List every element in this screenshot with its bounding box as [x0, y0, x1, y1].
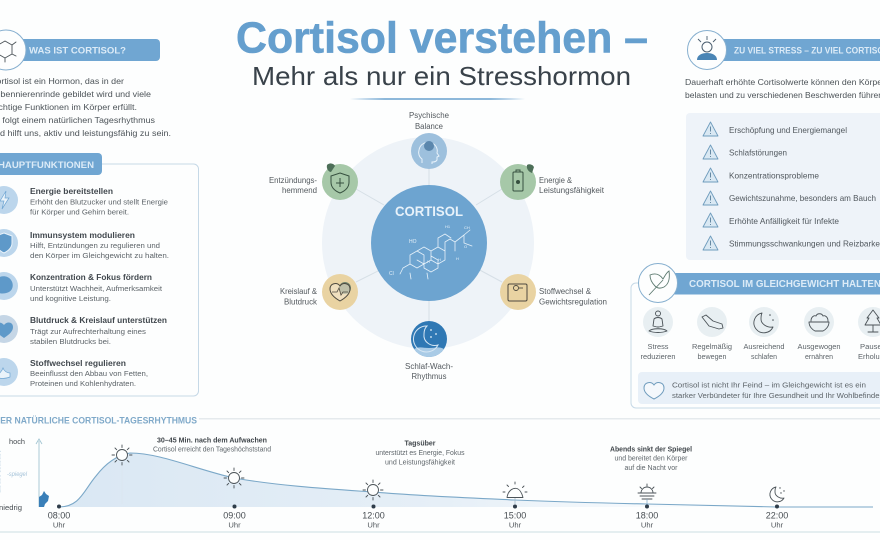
annotation: daytime: Tagsüber — [404, 438, 436, 448]
icon: axis marker — [39, 491, 49, 507]
node: stoffwechsel: Stoffwechsel & — [539, 287, 592, 296]
time markers: Uhr — [228, 520, 241, 530]
node: stoffwechsel: Gewichtsregulation — [539, 298, 607, 306]
symptom list: Erschöpfung und Energiemangel — [729, 125, 847, 135]
heading: HAUPTFUNKTIONEN — [0, 160, 94, 171]
node: kreislauf: Kreislauf & — [280, 287, 318, 296]
tip: schlafen: schlafen — [751, 352, 777, 361]
tip: stress reduzieren: reduzieren — [640, 352, 676, 361]
time markers: Uhr — [509, 520, 522, 530]
center circle — [371, 185, 487, 301]
tip: ernaehren: ernähren — [805, 352, 833, 361]
time markers: Uhr — [771, 520, 784, 530]
tip: bewegen: Regelmäßig — [692, 342, 732, 351]
subtitle: Mehr als nur ein Stresshormon — [252, 61, 631, 91]
time markers: 09:00 — [223, 510, 246, 520]
text block: Dauerhaft erhöhte Cortisolwerte können den Körper — [685, 77, 880, 87]
node: energie: Energie & — [539, 176, 573, 185]
time markers: 08:00 — [48, 510, 70, 520]
diagram: cortisol hub — [269, 111, 607, 381]
molecule structure: CH — [464, 225, 470, 230]
tip: bewegen — [692, 307, 732, 361]
molecule structure: H — [427, 259, 430, 264]
heading band — [10, 39, 160, 61]
icon: sun 09:00 — [224, 468, 244, 488]
annotation: evening: und bereitet den Körper — [614, 454, 688, 462]
callout: starker Verbündeter für Ihre Gesundheit und Ihr Wohlbefinden. — [672, 391, 880, 400]
node: energie: Leistungsfähigkeit — [539, 186, 605, 195]
tip: pausen — [858, 307, 880, 361]
tip: schlafen — [744, 307, 784, 361]
callout — [638, 372, 880, 404]
text block — [685, 77, 880, 100]
item: energie — [0, 186, 168, 216]
axis labels: -spiegel — [7, 472, 28, 478]
tip: ernaehren — [798, 307, 840, 361]
node: kreislauf — [280, 274, 358, 310]
node: kreislauf: Blutdruck — [284, 298, 318, 306]
y axis — [36, 439, 42, 507]
molecule structure: H — [456, 256, 459, 261]
symptom list: Gewichtszunahme, besonders am Bauch — [729, 193, 876, 203]
title block — [236, 14, 648, 100]
icon: leaf — [638, 264, 678, 302]
heading band — [670, 273, 880, 294]
annotation: morning peak: Cortisol erreicht den Tageshöchststand — [153, 444, 271, 454]
time markers — [48, 504, 788, 530]
item: blutdruck — [0, 315, 167, 346]
title: Cortisol verstehen – — [236, 14, 648, 62]
annotation: evening: auf die Nacht vor — [624, 463, 678, 472]
connectors — [356, 169, 502, 321]
panel: was ist cortisol — [0, 30, 171, 138]
annotation: evening — [610, 444, 692, 472]
molecule structure — [389, 224, 472, 279]
tip: ernaehren: Ausgewogen — [798, 342, 840, 351]
icon: sun peak — [112, 445, 132, 504]
symptom list: Erhöhte Anfälligkeit für Infekte — [729, 216, 839, 226]
icon: sun 12:00 — [363, 480, 383, 500]
molecule structure: O — [464, 244, 467, 249]
item: immunsystem — [0, 229, 169, 260]
heading band — [720, 39, 880, 61]
icon: stressed person — [688, 30, 726, 70]
panel: cortisol im gleichgewicht — [631, 264, 880, 408]
panel: hauptfunktionen — [0, 153, 198, 396]
heading: WAS IST CORTISOL? — [29, 46, 126, 56]
item: stoffwechsel — [0, 358, 148, 388]
chart: cortisol-tagesrhythmus — [0, 416, 880, 533]
time markers: Uhr — [367, 520, 380, 530]
tip: schlafen: Ausreichend — [744, 342, 784, 351]
tip: stress reduzieren: Stress — [648, 342, 669, 351]
symptom list: Konzentrationsprobleme — [729, 170, 819, 180]
annotation: daytime: und Leistungsfähigkeit — [385, 458, 455, 466]
item: konzentration: und kognitive Leistung. — [30, 294, 111, 303]
callout: Cortisol ist nicht Ihr Feind – im Gleichgewicht ist es ein — [672, 380, 866, 390]
molecule structure: HO — [409, 239, 417, 245]
node: schlaf-wach: Schlaf-Wach- — [405, 362, 453, 371]
annotation: morning peak: 30–45 Min. nach dem Aufwachen — [157, 436, 267, 444]
icon: sunset 18:00 — [638, 484, 656, 504]
item: blutdruck: Trägt zur Aufrechterhaltung eines — [30, 327, 146, 336]
time markers: 22:00 — [766, 510, 788, 520]
panel frame — [0, 164, 198, 396]
tip: bewegen: bewegen — [698, 352, 726, 361]
item: immunsystem: Immunsystem modulieren — [30, 230, 135, 240]
time markers: Uhr — [641, 520, 654, 530]
icon: moon 22:00 — [770, 487, 785, 502]
molecule structure: H1 — [445, 224, 451, 229]
time markers: 12:00 — [362, 510, 385, 520]
heading: CORTISOL IM GLEICHGEWICHT HALTEN — [689, 279, 880, 290]
node: psychische balance: Balance — [415, 122, 444, 131]
text block: belasten und zu verschiedenen Beschwerden führen — [685, 90, 880, 100]
item: energie: für Körper und Gehirn bereit. — [30, 208, 129, 216]
annotation: daytime — [376, 438, 465, 466]
text block — [0, 76, 171, 138]
item: immunsystem: den Körper im Gleichgewicht zu halten. — [30, 251, 169, 260]
backdrop circle — [322, 137, 534, 349]
molecule structure: H — [438, 257, 441, 262]
panel: zu viel stress — [685, 30, 880, 260]
title underline — [350, 98, 525, 100]
time markers: 15:00 — [504, 510, 526, 520]
node: entzuendungshemmend — [269, 163, 358, 200]
item: energie: Energie bereitstellen — [30, 186, 113, 196]
icon: cloud sun 15:00 — [503, 482, 527, 504]
item: blutdruck: stabilen Blutdrucks bei. — [30, 337, 111, 346]
heading tab — [0, 153, 102, 175]
panel frame — [631, 283, 880, 408]
item: blutdruck: Blutdruck & Kreislauf unterstützen — [30, 315, 167, 325]
item: konzentration: Unterstützt Wachheit, Aufmerksamkeit — [30, 284, 163, 293]
annotation: morning peak — [153, 436, 271, 454]
node: entzuendungshemmend: hemmend — [282, 186, 317, 195]
node: energie — [500, 164, 605, 200]
axis labels: hoch — [9, 437, 25, 446]
chart heading: DER NATÜRLICHE CORTISOL-TAGESRHYTHMUS — [0, 416, 197, 426]
symptom list: Schlafstörungen — [729, 148, 787, 158]
axis labels — [0, 437, 28, 512]
area under curve — [39, 453, 777, 507]
item: energie: Erhöht den Blutzucker und stellt Energie — [30, 198, 168, 206]
item: konzentration — [0, 272, 163, 303]
item: immunsystem: Hilft, Entzündungen zu regulieren und — [30, 241, 160, 250]
molecule structure: Cl — [389, 271, 394, 277]
node: psychische balance: Psychische — [409, 111, 450, 120]
symptom list — [686, 113, 880, 260]
node: psychische balance — [409, 111, 450, 169]
item: stoffwechsel: Proteinen und Kohlenhydraten. — [30, 379, 136, 388]
node: schlaf-wach: Rhythmus — [412, 372, 446, 381]
item: stoffwechsel: Beeinflusst den Abbau von Fetten, — [30, 369, 148, 378]
icon: molecule — [0, 30, 26, 70]
node: schlaf-wach — [405, 321, 453, 381]
item: stoffwechsel: Stoffwechsel regulieren — [30, 358, 126, 368]
time markers: Uhr — [53, 520, 66, 530]
item: konzentration: Konzentration & Fokus fördern — [30, 272, 152, 282]
curve line — [59, 453, 873, 507]
time markers: 18:00 — [636, 510, 658, 520]
annotation: daytime: unterstützt es Energie, Fokus — [376, 448, 465, 457]
annotation: evening: Abends sinkt der Spiegel — [610, 444, 692, 454]
node: stoffwechsel — [500, 274, 607, 310]
center circle: CORTISOL — [395, 203, 463, 219]
node: entzuendungshemmend: Entzündungs- — [269, 176, 317, 185]
tip: stress reduzieren — [640, 307, 676, 361]
